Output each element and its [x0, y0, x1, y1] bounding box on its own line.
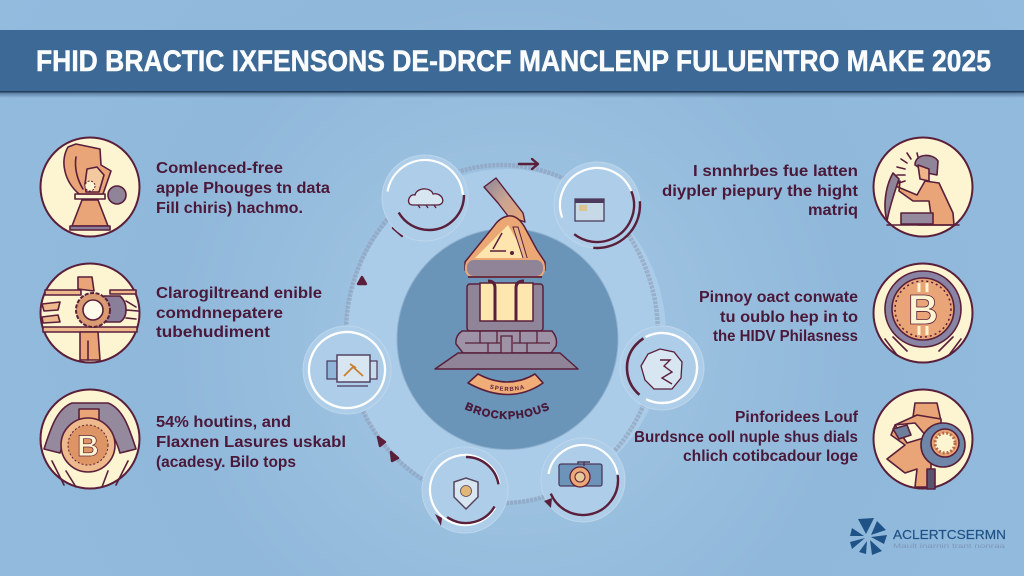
node: shield	[417, 442, 513, 538]
tower roof	[465, 216, 545, 270]
tower label: BROCKPHOUS	[464, 402, 549, 420]
text block: right 3	[634, 409, 859, 465]
panel: right text blocks	[634, 163, 859, 465]
text block: right 2: Pinnoy oact conwate	[699, 289, 858, 306]
tower columns	[480, 283, 533, 321]
light disc	[346, 169, 666, 501]
text block: left 1: Fill chiris) hachmo.	[156, 200, 303, 217]
tower skirt	[435, 353, 578, 369]
text block: right 3: Burdsnce ooll nuple shus dials	[634, 429, 858, 446]
icon: left 3 coin with arch: B	[77, 430, 99, 463]
text block: right 1	[662, 163, 858, 219]
node: virus-like cluster	[613, 319, 711, 417]
icon: left 2 gear and pipes	[40, 264, 140, 362]
node: monitor	[297, 320, 397, 420]
text block: right 2	[699, 289, 858, 345]
text block: left 2: comdnnepatere	[156, 305, 283, 322]
icon: right 3 person with magnifier	[874, 390, 972, 489]
logo mark	[850, 518, 887, 555]
node: window	[549, 157, 645, 253]
text block: right 1: matriq	[808, 202, 858, 219]
ribbon text: SPERBNA	[490, 384, 524, 391]
text block: right 2: the HIDV Philasness	[713, 328, 858, 345]
panel: left text blocks	[156, 160, 346, 471]
text block: left 3	[156, 414, 346, 471]
text block: left 2	[156, 285, 322, 341]
icon: left 1 hand on pedestal	[40, 138, 140, 236]
logo tagline: Mault inarnin trant nonraa	[893, 544, 1006, 550]
tower crane arm	[484, 178, 525, 222]
tower band	[466, 259, 544, 277]
tower stone base	[456, 331, 556, 353]
icon: right 2 bitcoin coin: B	[908, 286, 938, 333]
icon: right 1 person at desk	[874, 138, 972, 236]
text block: right 1: diypler piepury the hight	[662, 183, 858, 200]
text block: left 1: apple Phouges tn data	[156, 180, 330, 197]
text block: right 3: chlich cotibcadour loge	[683, 448, 858, 465]
text block: left 1	[156, 160, 330, 217]
text block: left 2: Clarogiltreand enible	[156, 285, 322, 302]
text block: left 2: tubehudiment	[156, 324, 270, 341]
text block: right 2: tu oublo hep in to	[720, 309, 858, 326]
text block: left 3: 54% houtins, and	[156, 414, 291, 431]
logo text: ACLERTCSERMN	[893, 527, 1006, 542]
text block: left 3: (acadesy. Bilo tops	[156, 454, 296, 471]
text block: right 3: Pinforidees Louf	[735, 409, 859, 426]
text block: left 1: Comlenced-free	[156, 160, 283, 177]
node: camera badge	[541, 438, 625, 522]
ring arrows	[358, 159, 538, 461]
icon: right 2 bitcoin coin	[874, 264, 972, 362]
icon: left 3 coin with arch	[40, 390, 140, 488]
text block: right 1: I snnhrbes fue latten	[693, 163, 858, 180]
ribbon	[468, 374, 543, 394]
central tower icon	[434, 177, 579, 420]
tower body	[467, 284, 543, 331]
logo	[850, 518, 1006, 555]
node: cloud	[381, 154, 469, 242]
central diagram	[302, 154, 704, 534]
title banner	[0, 30, 1024, 98]
dark inner circle	[397, 228, 618, 450]
text block: left 3: Flaxnen Lasures uskabl	[156, 434, 346, 451]
connecting ring	[346, 165, 658, 503]
